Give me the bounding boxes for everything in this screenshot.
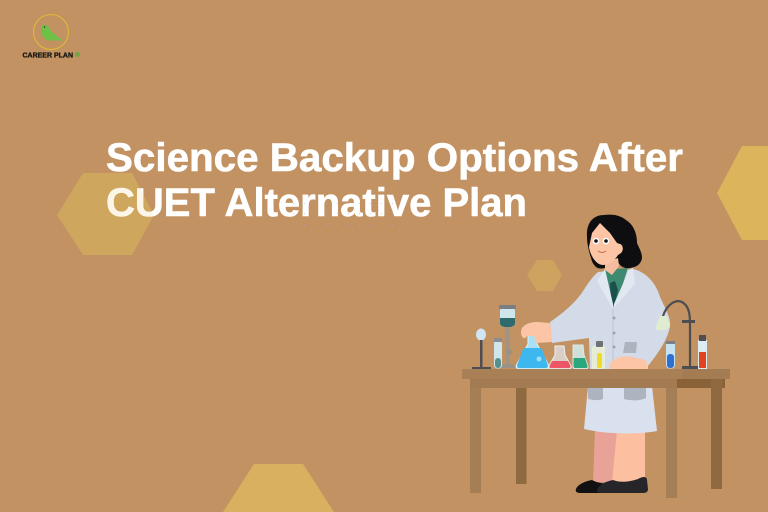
- hexagon: right edge: [717, 146, 768, 240]
- hair back: [587, 215, 642, 268]
- hand on table: [609, 356, 648, 369]
- face: [589, 223, 623, 265]
- hexagon tint over title: [57, 173, 154, 255]
- shoes: [576, 480, 612, 493]
- red flask: [549, 346, 571, 369]
- logo ring: [34, 14, 68, 50]
- logo bird legs: [49, 40, 52, 44]
- mouth: [598, 251, 606, 252]
- back table section: [677, 369, 730, 489]
- coat skirt: [584, 386, 657, 433]
- burner lamp: [655, 301, 698, 369]
- front table top: [462, 369, 682, 379]
- front table leg left: [470, 388, 481, 493]
- title line 2: CUET Alternative Plan: [106, 181, 527, 225]
- logo bird: [41, 25, 63, 40]
- coat pocket upper: [623, 342, 637, 353]
- funnel stand: [499, 305, 516, 368]
- front table apron: [470, 379, 677, 388]
- yellow vial: [592, 341, 605, 369]
- logo wordmark: CAREER PLAN: [22, 52, 73, 60]
- front table leg right: [666, 388, 677, 498]
- legs: [593, 430, 617, 482]
- faint dot pattern: [293, 203, 393, 225]
- title: [106, 136, 683, 225]
- coat pocket left: [588, 388, 603, 400]
- hexagon: small center: [527, 260, 562, 291]
- test tube blue: [666, 341, 675, 368]
- blue flask: [516, 335, 549, 369]
- test tube teal: [494, 338, 502, 368]
- coat center seam: [612, 308, 614, 369]
- hexagon: left behind title: [57, 173, 154, 255]
- buttons: [612, 316, 616, 348]
- coat pocket right: [624, 388, 646, 400]
- shirt and tie: [605, 268, 628, 308]
- title line 1: Science Backup Options After: [106, 136, 683, 180]
- logo bird eye: [44, 26, 45, 28]
- hand on flask: [521, 322, 552, 343]
- bulb stand: [472, 328, 491, 370]
- eyes: [593, 238, 599, 244]
- illustration: scientist at lab table: [462, 215, 730, 498]
- logo: [22, 14, 80, 60]
- logo dot: [75, 52, 80, 57]
- hexagon: bottom: [223, 464, 334, 512]
- coat body: [550, 269, 670, 369]
- back table leg: [516, 388, 526, 484]
- green flask: [573, 345, 588, 369]
- scientist: [521, 215, 670, 493]
- test tube red: [698, 335, 707, 369]
- coat lapels: [597, 269, 613, 309]
- neck: [605, 258, 619, 275]
